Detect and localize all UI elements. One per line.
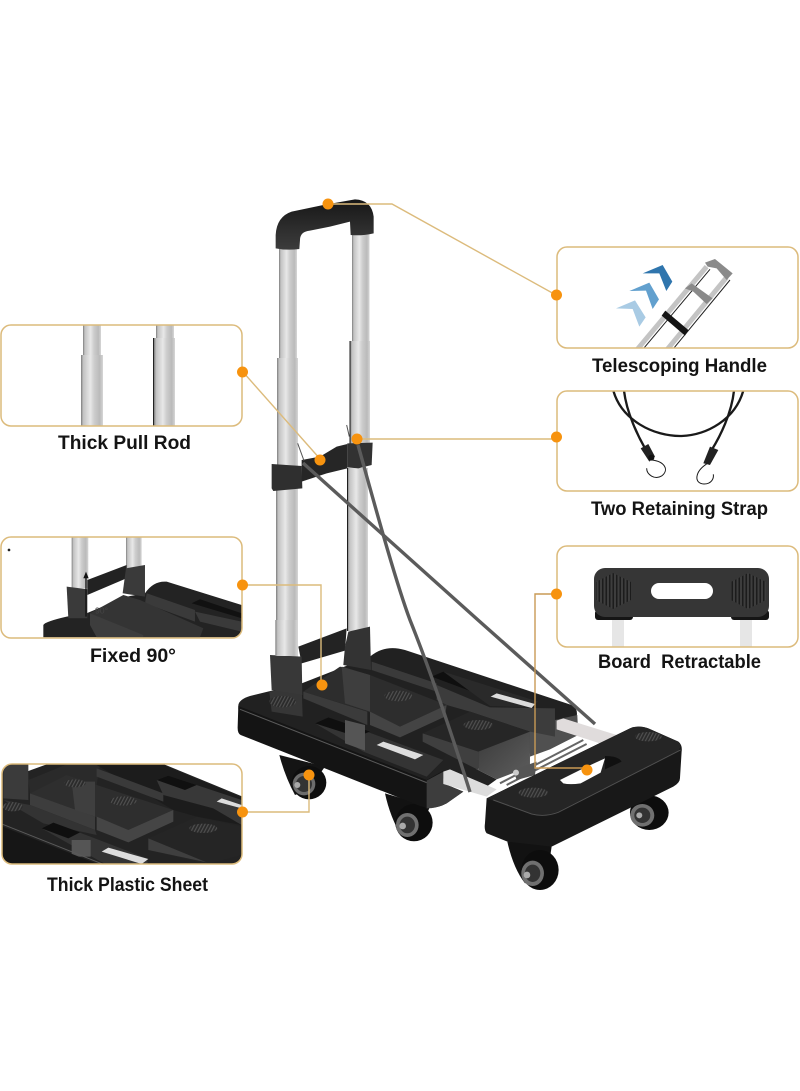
icon: front left wheel [385,793,433,841]
trolley product illustration [238,199,682,890]
icon: bungee cords and hooks [613,391,743,484]
icon: rear right wheel [630,795,669,830]
retractable rails [443,718,617,797]
icon: board with rails [594,568,769,647]
icon: pull rod close-up [81,325,175,427]
callout leader lines [243,204,587,812]
callout marker dots [237,198,592,818]
icon: telescoping rods [276,234,370,658]
label: Thick Pull Rod: Thick Pull Rod [58,433,191,454]
platform base [238,648,578,808]
icon: plastic sheet close-up [0,763,247,867]
panel: board retractable [557,546,798,647]
icon: handle grip [276,199,374,250]
icon: lower bracket [270,620,371,695]
icon: base with upright bracket [8,537,242,637]
label: Telescoping Handle: Telescoping Handle [592,356,767,377]
label: Fixed 90°: Fixed 90° [90,646,176,667]
panel: telescoping handle [557,247,798,350]
retaining straps [303,445,595,792]
icon: rising chevrons [616,265,672,327]
label: Board Retractable: Board Retractable [598,652,761,673]
panel: fixed 90 degrees [1,537,242,638]
raised storage blocks [303,667,530,779]
icon: folded handle [637,259,733,350]
icon: crossbar [272,425,373,491]
icon: front right wheel [507,842,559,890]
panel: two retaining strap [557,391,798,491]
icon: rear left wheel [279,755,326,799]
icon: base with upright bracket: 90° [95,605,108,615]
label: Thick Plastic Sheet: Thick Plastic Sheet [47,875,209,896]
panel: thick plastic sheet [0,763,247,867]
label: Two Retaining Strap: Two Retaining Strap [591,499,768,520]
panel: thick pull rod [1,325,242,427]
front retractable board [485,727,682,849]
